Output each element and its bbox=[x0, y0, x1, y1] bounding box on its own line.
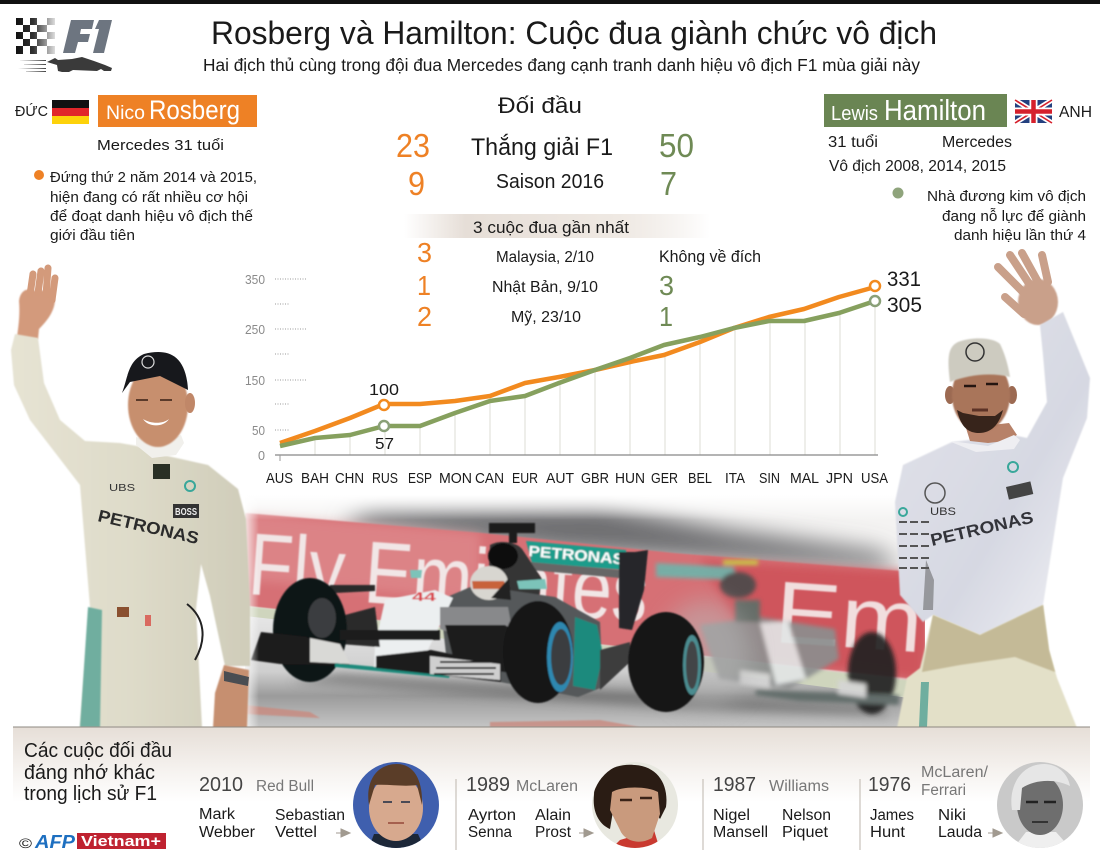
rivalry 2010: Mark bbox=[199, 806, 235, 823]
rivalry 2010: Sebastian bbox=[275, 807, 345, 824]
rivalry 2010: Red Bull bbox=[256, 778, 314, 795]
rivalry 1976: Lauda bbox=[938, 824, 982, 841]
rivalry 2010: Vettel bbox=[275, 824, 317, 841]
panel: head to head: Mỹ, 23/10 bbox=[511, 309, 581, 326]
Hamilton note: đang nỗ lực để giành bbox=[942, 208, 1086, 225]
panel: head to head: 3 cuộc đua gần nhất bbox=[473, 218, 629, 237]
line chart: points per race: BAH bbox=[301, 470, 329, 487]
line chart: points per race: 331 bbox=[887, 268, 921, 291]
line chart: points per race: GBR bbox=[581, 470, 609, 487]
line chart: points per race: MAL bbox=[790, 470, 819, 487]
heading: Các cuộc đối đầu bbox=[24, 740, 172, 762]
panel: Rosberg header bbox=[15, 95, 257, 154]
line chart: points per race: JPN bbox=[826, 470, 853, 487]
Rosberg note bbox=[34, 169, 257, 244]
panel: Hamilton header: Vô địch 2008, 2014, 2015 bbox=[829, 158, 1006, 175]
rivalry 1989: McLaren bbox=[516, 778, 578, 795]
panel: Hamilton header: ANH bbox=[1059, 104, 1092, 121]
race photo: Fly Emirates bbox=[246, 514, 652, 641]
portrait: Prost bbox=[592, 762, 678, 850]
rivalry 1987: Mansell bbox=[713, 824, 768, 841]
series: Hamilton bbox=[280, 301, 875, 446]
rivalry 1989: Senna bbox=[468, 824, 512, 841]
line chart: points per race: CHN bbox=[335, 470, 364, 487]
main car: 44 bbox=[412, 590, 437, 604]
credit: Vietnam+ bbox=[81, 833, 161, 850]
line chart: points per race: BEL bbox=[688, 470, 712, 487]
rivalry 1976: Niki bbox=[938, 807, 966, 824]
heading bbox=[24, 740, 172, 805]
panel: head to head: Malaysia, 2/10 bbox=[496, 249, 594, 266]
line chart: points per race: 50 bbox=[252, 423, 265, 438]
rivalry 1976: 1976 bbox=[868, 774, 911, 796]
rivalry 1987: Piquet bbox=[782, 824, 829, 841]
line chart: points per race: 57 bbox=[375, 436, 394, 453]
panel: head to head: Nhật Bản, 9/10 bbox=[492, 279, 598, 296]
rivalry 1976: James bbox=[870, 807, 914, 824]
line chart: points per race: ITA bbox=[725, 470, 745, 487]
panel: head to head: 2 bbox=[417, 301, 432, 332]
panel: head to head: Saison 2016 bbox=[496, 171, 604, 193]
panel: head to head: 1 bbox=[417, 270, 431, 301]
rivalry 1989 bbox=[466, 762, 678, 850]
panel: head to head: Đối đầu bbox=[498, 93, 582, 118]
line chart: points per race: 0 bbox=[258, 448, 265, 463]
Rosberg note: để đoạt danh hiệu vô địch thế bbox=[50, 208, 254, 225]
line chart: points per race: HUN bbox=[615, 470, 645, 487]
panel: head to head bbox=[396, 93, 761, 332]
credit: © bbox=[19, 835, 33, 851]
panel: Rosberg header: ĐỨC bbox=[15, 103, 48, 120]
Rosberg note: Đứng thứ 2 năm 2014 và 2015, bbox=[50, 169, 257, 186]
second car bbox=[656, 560, 899, 714]
rivalry 2010: Webber bbox=[199, 824, 255, 841]
rivalry 1976 bbox=[868, 762, 1083, 850]
Hamilton note bbox=[892, 188, 1086, 244]
top bar bbox=[0, 0, 1100, 4]
rivalry 2010: 2010 bbox=[199, 774, 243, 796]
icon: UK flag bbox=[1015, 100, 1052, 123]
panel: head to head: 1 bbox=[659, 301, 673, 332]
icon: German flag bbox=[52, 100, 89, 124]
rivalry 1976: Hunt bbox=[870, 824, 906, 841]
panel: head to head: 9 bbox=[408, 165, 425, 202]
panel: Hamilton header bbox=[824, 94, 1092, 175]
Rosberg note: hiện đang có rất nhiều cơ hội bbox=[50, 189, 248, 206]
credit bbox=[19, 832, 166, 852]
line chart: points per race: GER bbox=[651, 470, 678, 487]
panel: head to head: 23 bbox=[396, 127, 430, 164]
rivalry 1987: Nigel bbox=[713, 807, 750, 824]
rivalry 1987: Nelson bbox=[782, 807, 831, 824]
photo: Lewis Hamilton: PETRONAS bbox=[929, 508, 1035, 550]
line chart: points per race: CAN bbox=[475, 470, 504, 487]
photo: Lewis Hamilton: UBS bbox=[930, 506, 956, 518]
line chart: points per race: 305 bbox=[887, 294, 922, 317]
rivalry 1989: Alain bbox=[535, 807, 571, 824]
race photo: Emi bbox=[772, 562, 948, 673]
panel: head to head: 3 bbox=[659, 270, 674, 301]
main car: PETRONAS bbox=[528, 543, 625, 568]
line chart: points per race: SIN bbox=[759, 470, 780, 487]
series: Rosberg bbox=[280, 287, 875, 443]
panel: Rosberg header: Mercedes 31 tuổi bbox=[97, 137, 224, 154]
rivalry 1989: 1989 bbox=[466, 774, 510, 796]
panel: Rosberg header: Rosberg bbox=[149, 95, 240, 125]
panel: Hamilton header: 31 tuổi bbox=[828, 134, 878, 151]
line chart: points per race: 100 bbox=[369, 382, 399, 399]
line chart: points per race: ESP bbox=[408, 470, 432, 487]
line chart: points per race: 250 bbox=[245, 322, 265, 337]
line chart: points per race: AUS bbox=[266, 470, 293, 487]
photo fade bbox=[245, 495, 925, 727]
photo: Lewis Hamilton bbox=[895, 253, 1090, 728]
rivalry 2010 bbox=[199, 762, 439, 856]
Rosberg note: giới đầu tiên bbox=[50, 227, 135, 244]
line chart: points per race: MON bbox=[439, 470, 472, 487]
photo: Nico Rosberg: BOSS bbox=[175, 507, 197, 518]
rivalry 1989: Ayrton bbox=[468, 807, 516, 824]
panel: head to head: Không về đích bbox=[659, 248, 761, 266]
panel: head to head: 7 bbox=[660, 165, 677, 202]
rivalry 1976: Ferrari bbox=[921, 782, 966, 799]
line chart: points per race: RUS bbox=[372, 470, 398, 487]
panel: Hamilton header: Mercedes bbox=[942, 134, 1012, 151]
line chart: points per race: 350 bbox=[245, 272, 265, 287]
Hamilton note: danh hiệu lần thứ 4 bbox=[954, 227, 1086, 244]
rivalry 1987 bbox=[713, 774, 831, 841]
panel: head to head: 50 bbox=[659, 127, 694, 164]
portrait: Lauda bbox=[997, 762, 1083, 850]
photo: Nico Rosberg: UBS bbox=[109, 483, 135, 494]
race photo bbox=[245, 495, 948, 727]
line chart: points per race: USA bbox=[861, 470, 888, 487]
line chart: points per race: EUR bbox=[512, 470, 538, 487]
F1 logo bbox=[16, 18, 112, 72]
panel: Hamilton header: Lewis bbox=[831, 103, 878, 125]
rivalry 1989: Prost bbox=[535, 824, 572, 841]
subtitle: Hai địch thủ cùng trong đội đua Mercedes đang cạnh tranh danh hiệu vô địch F1 mùa giải này bbox=[203, 55, 920, 75]
rivalry 1987: Williams bbox=[769, 778, 829, 795]
panel: head to head: 3 bbox=[417, 237, 432, 268]
panel: other rivalries bbox=[13, 727, 1090, 856]
heading: trong lịch sử F1 bbox=[24, 783, 157, 805]
rivalry 1987: 1987 bbox=[713, 774, 756, 796]
photo: Nico Rosberg bbox=[11, 268, 250, 728]
panel: Rosberg header: Nico bbox=[106, 103, 145, 124]
panel: head to head: Thắng giải F1 bbox=[471, 134, 613, 161]
Hamilton note: Nhà đương kim vô địch bbox=[927, 188, 1086, 205]
credit: AFP bbox=[34, 832, 76, 852]
panel: Hamilton header: Hamilton bbox=[884, 95, 986, 127]
portrait: Vettel bbox=[353, 762, 439, 856]
photo: Nico Rosberg: PETRONAS bbox=[96, 506, 201, 548]
divider bbox=[456, 779, 860, 850]
main car bbox=[251, 523, 704, 712]
title: Rosberg và Hamilton: Cuộc đua giành chức vô địch bbox=[211, 15, 937, 51]
line chart: points per race bbox=[245, 268, 922, 487]
heading: đáng nhớ khác bbox=[24, 762, 155, 784]
rivalry 1976: McLaren/ bbox=[921, 764, 989, 781]
line chart: points per race: 150 bbox=[245, 373, 265, 388]
line chart: points per race: AUT bbox=[546, 470, 574, 487]
